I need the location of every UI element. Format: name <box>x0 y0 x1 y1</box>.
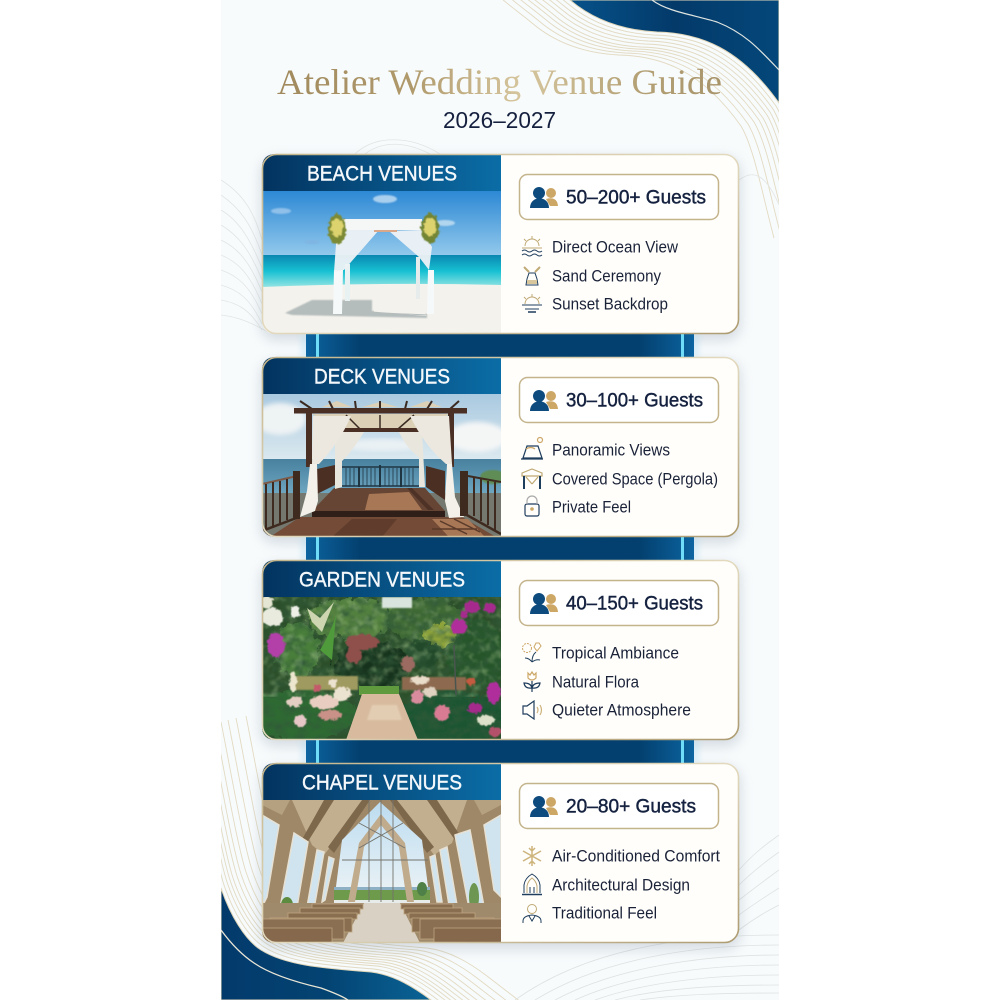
icon: sunset <box>522 294 542 312</box>
garden features: Tropical Ambiance <box>552 645 679 663</box>
chapel guest badge: 20–80+ Guests <box>566 796 696 818</box>
card shadows <box>260 157 741 950</box>
page background <box>221 0 779 1000</box>
beach features: Sunset Backdrop <box>552 296 668 314</box>
garden header: GARDEN VENUES <box>299 568 465 592</box>
back wall rails <box>342 465 419 487</box>
platform <box>312 488 445 511</box>
garden header <box>262 560 501 597</box>
icon: arch <box>522 874 542 894</box>
icon: tropical flowers <box>522 643 541 662</box>
deck features: Panoramic Views <box>552 442 670 460</box>
background decoration: top right wave <box>502 0 779 238</box>
subtitle: 2026–2027 <box>443 107 556 133</box>
deck features: Covered Space (Pergola) <box>552 471 718 489</box>
deck features <box>521 438 718 517</box>
icon: guests <box>530 187 558 208</box>
side windows <box>262 815 501 913</box>
icon: sand bottle <box>524 267 540 285</box>
garden photo <box>262 597 501 740</box>
chapel features: Air-Conditioned Comfort <box>552 848 720 866</box>
panel: chapel venues <box>260 763 739 944</box>
icon: guests <box>530 593 558 614</box>
garden guest badge <box>520 580 718 626</box>
panel: beach venues <box>262 154 739 334</box>
arbor posts <box>345 264 350 301</box>
beach features: Sand Ceremony <box>552 268 662 286</box>
icon: ocean sun <box>522 236 542 256</box>
garden features: Natural Flora <box>552 674 640 692</box>
icon: snowflake <box>523 846 541 866</box>
title: Atelier Wedding Venue Guide <box>277 62 722 102</box>
icon: officiant <box>523 904 541 923</box>
centre window <box>336 802 428 887</box>
chapel features: Traditional Feel <box>552 905 657 923</box>
icon: guests <box>530 796 558 817</box>
beach guest badge <box>520 174 718 220</box>
deck photo <box>254 394 507 537</box>
deck header: DECK VENUES <box>314 366 450 388</box>
beach guest badge: 50–200+ Guests <box>566 186 706 208</box>
flowers <box>261 596 501 737</box>
connector bars between cards <box>301 334 699 764</box>
beach header: BEACH VENUES <box>307 162 457 186</box>
icon: panorama <box>521 438 543 459</box>
beach features <box>522 236 678 314</box>
deck header <box>262 357 501 394</box>
icon: guests <box>530 390 558 411</box>
ceiling vaults <box>292 800 367 855</box>
chapel guest badge <box>520 784 718 828</box>
beach photo <box>262 191 501 334</box>
chapel floor and pews <box>262 903 501 943</box>
icon: lock <box>525 496 539 516</box>
side rails <box>262 471 300 531</box>
lower deck <box>270 517 496 537</box>
garden features: Quieter Atmosphere <box>552 702 691 720</box>
beach header <box>262 154 501 191</box>
icon: speaker <box>523 701 542 719</box>
background decoration: bottom right contour lines <box>515 835 779 1000</box>
background decoration: left contour lines <box>221 140 779 332</box>
deck guest badge <box>520 378 718 422</box>
background decoration: bottom left wave <box>221 716 519 1000</box>
chapel header <box>262 763 501 800</box>
garden features <box>522 643 691 720</box>
flowers <box>328 213 439 244</box>
curtains <box>335 432 364 489</box>
icon: tulip <box>524 672 540 692</box>
pergola <box>312 414 450 429</box>
icon: pergola <box>522 469 542 489</box>
chapel header: CHAPEL VENUES <box>302 772 462 794</box>
chapel features <box>522 846 720 923</box>
deck features: Private Feel <box>552 499 631 517</box>
panel: deck venues <box>254 357 739 537</box>
chapel features: Architectural Design <box>552 877 690 895</box>
deck guest badge: 30–100+ Guests <box>566 390 703 412</box>
garden guest badge: 40–150+ Guests <box>566 592 703 614</box>
beach features: Direct Ocean View <box>552 239 678 257</box>
panel: garden venues <box>247 560 739 744</box>
chapel photo <box>260 800 504 944</box>
